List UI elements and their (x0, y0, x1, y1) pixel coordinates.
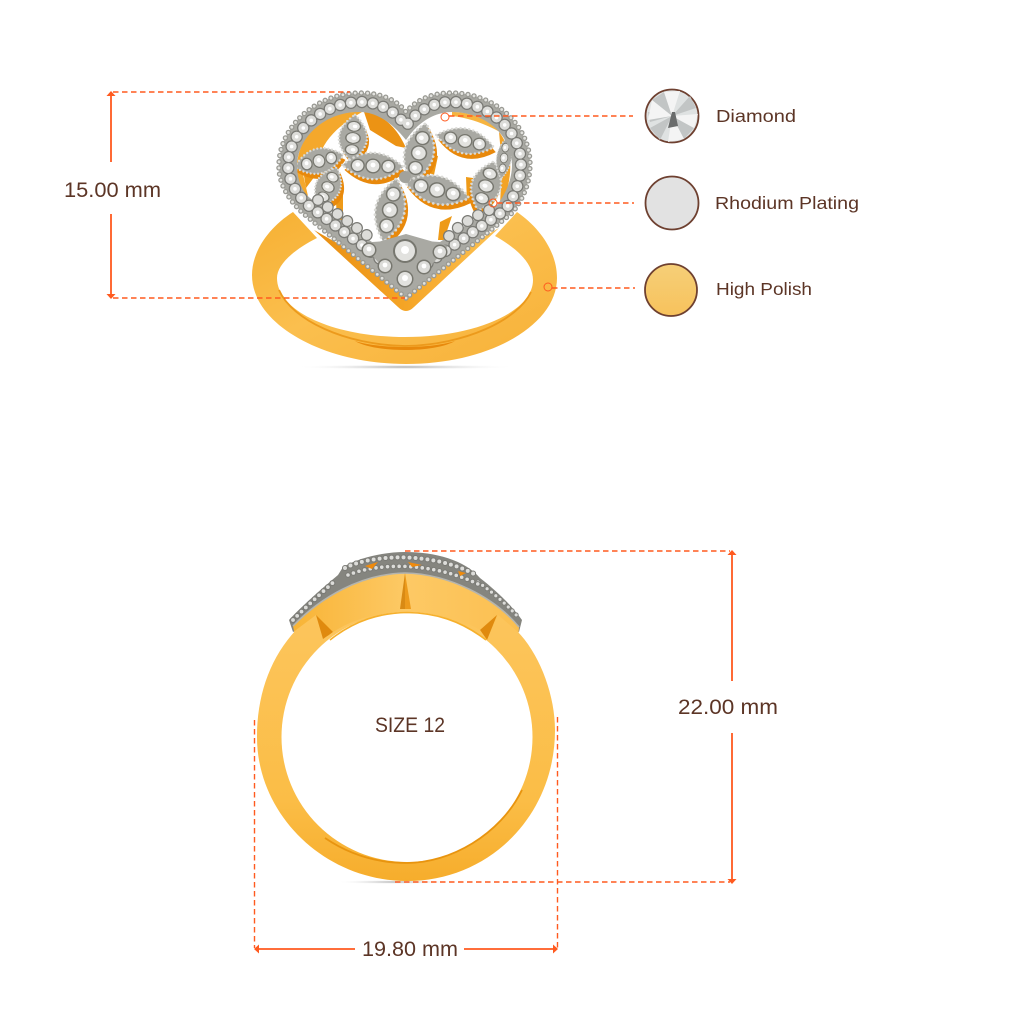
dimension: height 22.00 mm (395, 550, 778, 884)
ring band (257, 615, 555, 881)
heart gold back plate (314, 228, 499, 311)
lower left arc diamonds (318, 200, 368, 236)
milgrain border (279, 93, 530, 298)
gold strips under petals (304, 153, 473, 240)
petal down (369, 175, 411, 245)
ring front view (257, 552, 555, 884)
shoulder notch right (480, 615, 497, 640)
head centre crease (400, 573, 405, 609)
ring side view (252, 93, 557, 370)
frame diamond sparkle (288, 102, 521, 278)
petal shadows (294, 117, 506, 250)
legend: high polish (544, 264, 812, 316)
shank inner lip (279, 290, 531, 346)
dimension: height 15.00 mm: 15.00 mm (64, 179, 161, 202)
head underside fill (323, 612, 487, 640)
legend: rhodium plating (489, 176, 859, 230)
pave beads (293, 580, 336, 620)
legend: rhodium plating: Rhodium Plating (715, 193, 859, 213)
dimension: height 15.00 mm (64, 91, 405, 299)
shank bottom reflection (355, 341, 455, 350)
heart pave frame (279, 93, 530, 298)
petal right (402, 169, 472, 211)
lower right arc diamonds (449, 207, 497, 236)
label: ring size: SIZE 12 (375, 714, 445, 737)
gold crescent right lobe (499, 132, 510, 204)
ring opening (282, 612, 532, 862)
flower petals (292, 113, 514, 250)
bottom point diamonds (362, 234, 448, 294)
petal top left (337, 113, 369, 163)
legend: diamond (441, 90, 796, 142)
legend: high polish: High Polish (716, 279, 812, 299)
frame diamonds (288, 102, 521, 278)
ring shank (252, 212, 557, 364)
crease highlight (405, 573, 411, 609)
lower left arc faces (318, 200, 368, 236)
legend: diamond: Diamond (716, 106, 796, 126)
dimension: width 19.80 mm (254, 717, 558, 961)
ground shadow (293, 364, 517, 370)
frame diamond faces (288, 102, 521, 278)
dimension: width 19.80 mm: 19.80 mm (362, 938, 458, 961)
petal lower left (308, 162, 348, 212)
milgrain highlights (279, 93, 530, 298)
petal centre left (342, 152, 404, 180)
gold thin arc right lobe (452, 112, 500, 132)
petal left (292, 143, 346, 179)
petal top right (434, 123, 496, 159)
petal lower right (464, 157, 508, 215)
petal up (398, 120, 440, 186)
head rim (293, 573, 519, 627)
gold wedge top (364, 112, 406, 148)
petal narrow right (494, 136, 514, 180)
petal centre junction (399, 171, 411, 183)
heart interior gold walls (297, 112, 510, 240)
inner lip bottom (325, 790, 522, 863)
inner lip top (330, 612, 486, 640)
frame metal (279, 93, 530, 298)
pave base (289, 552, 522, 632)
pave stones on top (289, 552, 522, 632)
lower right arc faces (449, 207, 497, 236)
dimension: height 22.00 mm: 22.00 mm (678, 696, 778, 719)
shoulder notch left (316, 615, 333, 639)
gold crescent left lobe (297, 112, 362, 196)
gold head wing (293, 573, 519, 660)
ground shadow (335, 880, 455, 884)
